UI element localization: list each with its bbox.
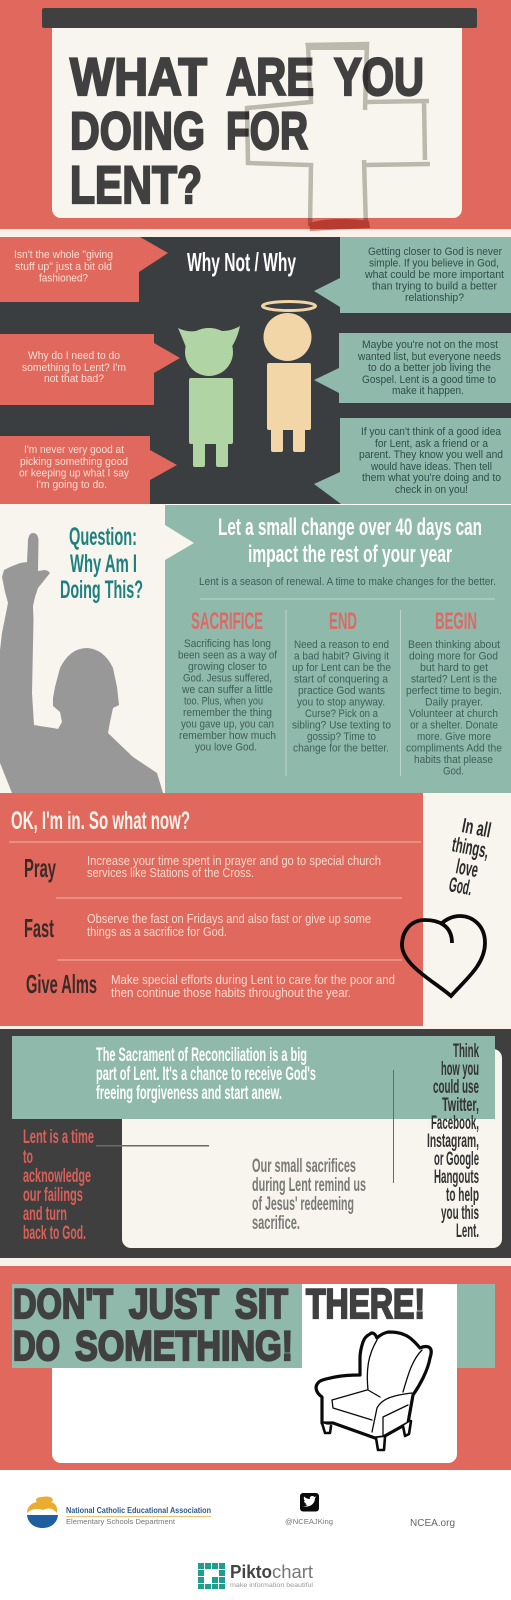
column: sacrifice: you gave up, you can — [181, 718, 274, 730]
heading: ok I'm in: OK, I'm in. So what now? — [11, 807, 190, 835]
icon: heart — [402, 916, 485, 996]
callout: ask a friend: If you can't think of a good idea — [361, 426, 502, 438]
callout: never very good: I'm going to do. — [36, 479, 107, 491]
item: give alms: Make special efforts during Lent to care for the poor and — [111, 973, 395, 987]
text: in all things love god — [447, 814, 493, 900]
column: sacrifice: you love God. — [195, 742, 257, 754]
callout: most wanted: make it happen. — [392, 385, 464, 397]
text: small sacrifices: Our small sacrifices — [252, 1155, 356, 1177]
text: lent is a time: and turn — [23, 1203, 67, 1225]
heading: question — [60, 523, 143, 604]
heading: don't just sit there: DON'T — [13, 1280, 113, 1327]
panel: do something — [0, 1266, 511, 1470]
heading: question: Doing This? — [60, 576, 143, 604]
logo: ncea — [27, 1496, 211, 1528]
column: begin: more. Give more — [417, 731, 491, 743]
column: begin: Volunteer at church — [409, 708, 498, 720]
callout: getting closer: relationship? — [405, 292, 464, 304]
white card — [52, 1284, 457, 1463]
text: twitter handle: @NCEAJKing — [285, 1517, 333, 1526]
column: begin: habits that please — [414, 754, 493, 766]
callout: not that bad: something fo Lent? I'm — [22, 362, 126, 374]
heading: don't just sit there: DO — [13, 1322, 60, 1369]
column: begin: started? Lent is the — [411, 674, 497, 686]
text: sacrament: freeing forgiveness and start anew. — [96, 1082, 282, 1104]
heading: don't just sit there: THERE! — [306, 1280, 425, 1327]
icon: sketched cross — [247, 43, 430, 231]
item: give alms: then continue those habits throughout the year. — [111, 986, 351, 1000]
text: in all things love god: In all — [460, 814, 493, 842]
text: lent is a time: acknowledge — [23, 1165, 91, 1187]
speech pointer — [165, 525, 194, 560]
title: LENT? — [70, 156, 202, 215]
callout: most wanted: wanted list, but everyone needs — [357, 351, 501, 363]
callout: not that bad: Why do I need to do — [28, 350, 120, 362]
callout: most wanted: to do a better job living the — [368, 362, 491, 374]
icon: armchair — [316, 1332, 431, 1450]
item: pray: services like Stations of the Cross. — [87, 866, 254, 880]
callout: never very good — [0, 436, 177, 504]
column: begin: doing more for God — [409, 650, 498, 662]
panel: so what now — [0, 793, 511, 1026]
logo: ncea: National Catholic Educational Association — [66, 1506, 211, 1515]
column: sacrifice: remember how much — [179, 730, 276, 742]
column: sacrifice: Sacrificing has long — [184, 638, 271, 650]
heading: don't just sit there — [13, 1280, 425, 1369]
title: FOR — [226, 102, 308, 161]
callout: getting closer — [314, 237, 511, 313]
text: social media: to help — [446, 1184, 479, 1206]
silhouette: raised finger — [0, 533, 163, 793]
panel: title header — [0, 0, 511, 237]
text: lent is a time: our failings — [23, 1184, 83, 1206]
item: fast: things as a sacrifice for God. — [87, 925, 227, 939]
text: small sacrifices: of Jesus' redeeming — [252, 1193, 354, 1215]
column: sacrifice: SACRIFICE — [191, 608, 263, 635]
panel: why am I doing this — [0, 504, 511, 793]
column: sacrifice — [178, 608, 278, 754]
item: pray — [24, 853, 381, 883]
text: website: NCEA.org — [410, 1517, 455, 1529]
logo: piktochart — [198, 1561, 314, 1589]
heading: don't just sit there: SOMETHING! — [75, 1322, 293, 1369]
icon: angel figure — [262, 302, 316, 452]
column: begin: compliments Add the — [406, 742, 502, 754]
title: WHAT — [70, 48, 207, 107]
heading: don't just sit there: SIT — [235, 1280, 288, 1327]
column: end: start of conquering a — [294, 674, 389, 686]
column: end: Need a reason to end — [294, 639, 389, 651]
text: small sacrifices: sacrifice. — [252, 1212, 300, 1234]
column: begin: BEGIN — [435, 608, 477, 635]
callout: not that bad — [0, 334, 180, 405]
callout: getting closer: what could be more important — [364, 269, 505, 281]
icon: twitter — [300, 1493, 319, 1512]
text: sacrament: part of Lent. It's a chance to receive God's — [96, 1063, 316, 1085]
item: fast: Observe the fast on Fridays and also fast or give up some — [87, 912, 371, 926]
column: sacrifice: God. Jesus suffered, — [183, 672, 272, 684]
item: fast: Fast — [24, 913, 54, 943]
column: end: up for Lent can be the — [292, 662, 391, 674]
callout: never very good: picking something good — [20, 456, 128, 468]
logo: piktochart: make information beautiful — [230, 1582, 314, 1589]
callout: ask a friend: them what you're doing and to — [362, 472, 501, 484]
text: small sacrifices: during Lent remind us — [252, 1174, 366, 1196]
banner — [12, 1036, 495, 1119]
callout: not that bad: not that bad? — [44, 373, 104, 385]
text: sacrament — [96, 1044, 316, 1104]
panel: reconciliation — [0, 1026, 511, 1266]
text: lent is a time: back to God. — [23, 1222, 86, 1244]
callout: never very good: I'm never very good at — [24, 444, 125, 456]
callout: old fashioned — [0, 237, 168, 302]
callout: old fashioned: Isn't the whole "giving — [14, 249, 113, 261]
heading: question: Why Am I — [70, 550, 137, 578]
heading: why not why: Why Not / Why — [187, 247, 296, 277]
callout: most wanted: Gospel. Lent is a good time to — [362, 374, 496, 386]
title — [70, 48, 424, 215]
column: begin: Been thinking about — [408, 639, 501, 651]
column: end: sibling? Use texting to — [292, 720, 391, 732]
title: ARE — [226, 48, 314, 107]
text: social media: Think — [453, 1040, 479, 1062]
callout: getting closer: simple. If you believe in God, — [369, 258, 499, 270]
column: begin: perfect time to begin. — [406, 685, 502, 697]
text: social media — [427, 1040, 479, 1242]
teal blocks — [12, 1284, 302, 1368]
text: small sacrifices — [252, 1155, 366, 1234]
text: social media: Twitter, — [442, 1094, 479, 1116]
column: end: END — [329, 608, 357, 635]
content card — [122, 1049, 502, 1248]
panel: why not / why — [0, 237, 511, 504]
heading: small change — [218, 514, 482, 568]
column: end — [292, 608, 391, 754]
title: DOING — [70, 102, 205, 161]
logo: ncea: Elementary Schools Department — [66, 1517, 176, 1526]
callout: old fashioned: stuff up" just a bit old — [15, 261, 112, 273]
icon: devil figure — [178, 326, 240, 467]
item: fast — [24, 912, 371, 943]
column: end: practice God wants — [298, 685, 385, 697]
heading: question: Question: — [69, 523, 137, 551]
text: in all things love god: God. — [447, 873, 474, 900]
callout: ask a friend: check in on you! — [395, 484, 468, 496]
column: sacrifice: been seen as a way of — [178, 650, 278, 662]
column: sacrifice: we can suffer a little — [181, 684, 273, 696]
column: end: change for the better. — [293, 742, 389, 754]
column: begin: God. — [443, 766, 464, 778]
column: end: you to stop anyway. — [297, 696, 385, 708]
text: lent is a time: Lent is a time — [23, 1126, 94, 1148]
column: sacrifice: remember the thing — [183, 707, 272, 719]
text: in all things love god: love — [454, 855, 480, 882]
panel: reconciliation: Lent. — [456, 1220, 479, 1242]
text: lent is a time — [23, 1126, 94, 1244]
callout: ask a friend: would have ideas. Then tell — [370, 461, 492, 473]
text: sacrament: The Sacrament of Reconciliation is a big — [96, 1044, 307, 1066]
callout: ask a friend — [314, 418, 511, 504]
text: lent is a time: to — [23, 1146, 33, 1168]
callout: most wanted — [314, 333, 511, 403]
callout: never very good: or keeping up what I say — [19, 468, 129, 480]
callout: most wanted: Maybe you're not on the most — [362, 339, 499, 351]
column: sacrifice: growing closer to — [188, 661, 267, 673]
column: begin — [406, 608, 502, 778]
column: end: Curse? Pick on a — [305, 708, 379, 720]
column: sacrifice: too. Plus, when you — [184, 696, 263, 708]
footer — [27, 1493, 455, 1589]
logo: piktochart: chart — [272, 1561, 313, 1582]
column: begin: but hard to get — [420, 662, 489, 674]
callout: old fashioned: fashioned? — [39, 272, 88, 284]
callout: getting closer: than trying to build a better — [372, 280, 497, 292]
item: give alms: Give Alms — [26, 969, 97, 999]
column: begin: Daily prayer. — [425, 696, 483, 708]
item: pray: Increase your time spent in prayer and go to special church — [87, 854, 381, 868]
title: YOU — [334, 48, 424, 107]
column: end: a bad habit? Giving it — [294, 650, 390, 662]
logo: piktochart: Pikto — [230, 1561, 272, 1582]
item: pray: Pray — [24, 853, 56, 883]
title card — [52, 20, 462, 218]
column: end: gossip? Time to — [307, 731, 376, 743]
item: give alms — [26, 969, 395, 1000]
heading: don't just sit there: JUST — [129, 1280, 219, 1327]
column: begin: or a shelter. Donate — [410, 720, 498, 732]
title bar — [42, 8, 477, 28]
callout: ask a friend: for Lent, ask a friend or a — [375, 438, 489, 450]
